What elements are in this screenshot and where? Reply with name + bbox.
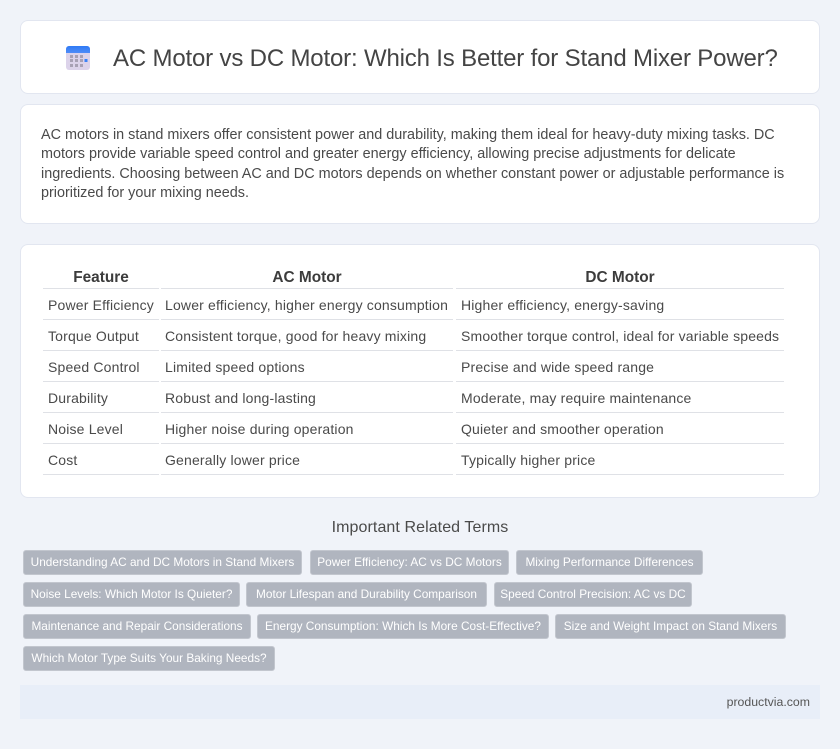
text block: introduction: AC motors in stand mixers offer consistent power and durability, making them ideal for heavy-duty mixing tasks. DC (41, 127, 775, 143)
tag: Speed Control Precision: AC vs DC (500, 587, 686, 601)
comparison table: Robust and long-lasting (165, 390, 316, 406)
tag (494, 582, 692, 607)
tag (23, 582, 240, 607)
comparison table: Higher efficiency, energy-saving (461, 297, 664, 313)
tag (516, 550, 703, 575)
row: Power Efficiency: Power Efficiency (48, 297, 154, 313)
comparison table: Consistent torque, good for heavy mixing (165, 328, 426, 344)
tag (23, 614, 251, 639)
row: Durability: Durability (48, 390, 108, 406)
panel: comparison table (20, 244, 820, 498)
row: Noise Level: Noise Level (48, 421, 123, 437)
column header: DC Motor: DC Motor (585, 269, 655, 286)
row: Torque Output: Torque Output (48, 328, 139, 344)
tag (257, 614, 549, 639)
tag: Size and Weight Impact on Stand Mixers (564, 619, 777, 633)
tag: Which Motor Type Suits Your Baking Needs? (31, 651, 267, 665)
tag: Understanding AC and DC Motors in Stand Mixers (31, 555, 294, 569)
tag: Maintenance and Repair Considerations (31, 619, 243, 633)
tag (310, 550, 509, 575)
comparison table: Typically higher price (461, 452, 595, 468)
comparison table: Limited speed options (165, 359, 305, 375)
column header: AC Motor: AC Motor (272, 269, 342, 286)
tag (246, 582, 487, 607)
title: AC Motor vs DC Motor: Which Is Better for Stand Mixer Power? (113, 45, 778, 72)
text block: introduction (41, 127, 784, 201)
tag: Power Efficiency: AC vs DC Motors (317, 555, 502, 569)
comparison table: Lower efficiency, higher energy consumption (165, 297, 448, 313)
comparison table: Generally lower price (165, 452, 300, 468)
text block: introduction: motors provide variable speed control and greater energy efficiency, allowing precise adjustments for delicate (41, 146, 736, 162)
tag: Energy Consumption: Which Is More Cost-Effective? (265, 619, 541, 633)
text block: introduction: ingredients. Choosing between AC and DC motors depends on whether constant power or adjustable performance is (41, 166, 784, 182)
panel: title header (20, 20, 820, 94)
row: Speed Control: Speed Control (48, 359, 140, 375)
comparison table: Quieter and smoother operation (461, 421, 664, 437)
tag: Noise Levels: Which Motor Is Quieter? (31, 587, 232, 601)
comparison table: Higher noise during operation (165, 421, 354, 437)
footer bar (20, 685, 820, 719)
text block: introduction: prioritized for your mixing needs. (41, 185, 249, 201)
panel: introduction (20, 104, 820, 224)
footer source text: productvia.com (727, 695, 810, 709)
column header: Feature: Feature (73, 269, 129, 286)
comparison table: Precise and wide speed range (461, 359, 654, 375)
tag (23, 550, 302, 575)
tag: Motor Lifespan and Durability Comparison (256, 587, 477, 601)
heading: related terms: Important Related Terms (332, 519, 508, 536)
comparison table: Smoother torque control, ideal for variable speeds (461, 328, 779, 344)
tag list: related terms (23, 550, 786, 671)
comparison table (43, 269, 784, 475)
comparison table: Moderate, may require maintenance (461, 390, 692, 406)
row: Cost: Cost (48, 452, 77, 468)
tag (555, 614, 786, 639)
tag: Mixing Performance Differences (525, 555, 694, 569)
icon: calendar (66, 46, 90, 70)
tag (23, 646, 275, 671)
